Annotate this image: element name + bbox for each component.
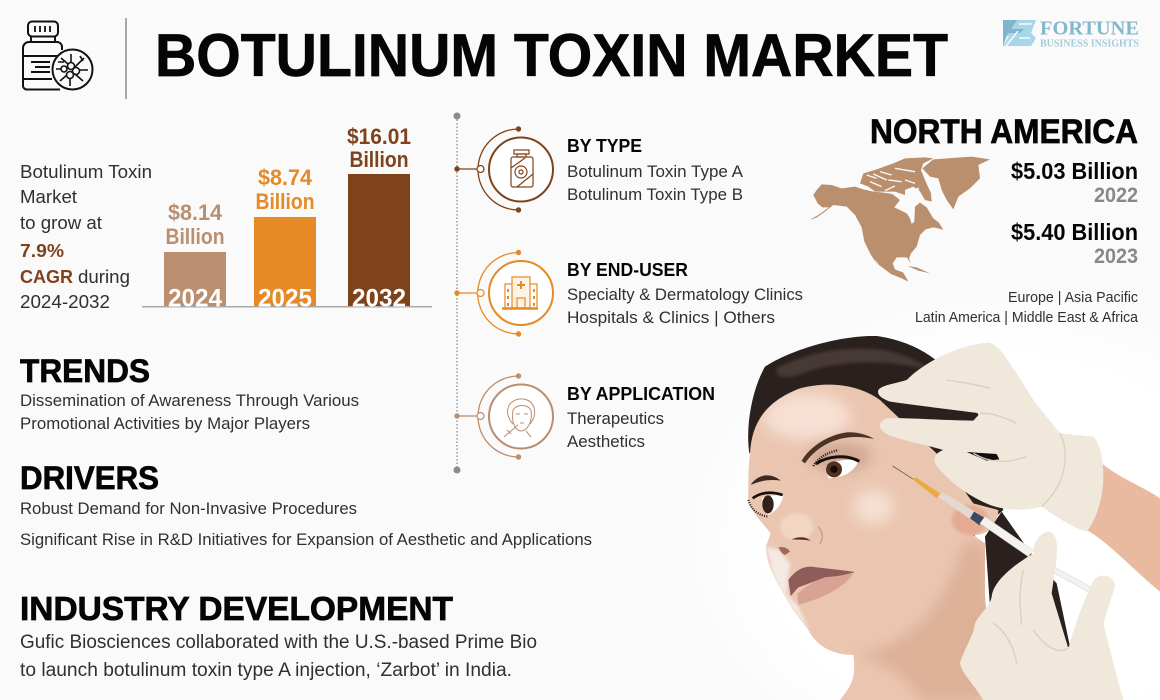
trends section: Promotional Activities by Major Players bbox=[20, 414, 310, 433]
stat: 2023 bbox=[1011, 219, 1138, 268]
text block: CAGR summary: 7.9% bbox=[20, 240, 64, 261]
drivers section: DRIVERS bbox=[20, 460, 159, 496]
segment: by application: Therapeutics bbox=[567, 409, 664, 428]
drivers section: Robust Demand for Non-Invasive Procedures bbox=[20, 499, 357, 518]
icon: medicine bottle with virus bbox=[23, 22, 92, 90]
bar 2025: 2025 bbox=[258, 284, 312, 312]
face shading bbox=[763, 393, 997, 700]
industry development section: Gufic Biosciences collaborated with the U.S.-based Prime Bio bbox=[20, 632, 537, 653]
other regions: Europe | Asia Pacific bbox=[1008, 290, 1138, 306]
lips bbox=[788, 567, 855, 605]
upper gloved hand bbox=[878, 343, 1103, 532]
hair bbox=[748, 336, 1003, 537]
icon: vial bbox=[511, 150, 533, 187]
text block: CAGR summary: to grow at bbox=[20, 212, 102, 233]
stat: 2022: $5.03 Billion bbox=[1011, 158, 1138, 184]
trends section: Dissemination of Awareness Through Various bbox=[20, 391, 359, 410]
lower gloved hand bbox=[960, 532, 1123, 700]
stat: 2022: 2022 bbox=[1094, 184, 1138, 207]
trends section: TRENDS bbox=[20, 353, 150, 389]
bar 2032: $16.01 bbox=[347, 124, 411, 149]
segment timeline bbox=[454, 112, 460, 474]
nose bbox=[778, 527, 822, 555]
segment: by end-user: Specialty & Dermatology Clinics bbox=[567, 285, 803, 304]
bar 2024: $8.14 bbox=[168, 200, 223, 225]
header divider bbox=[125, 18, 127, 99]
segment: by application bbox=[454, 373, 715, 460]
drivers section bbox=[20, 460, 592, 549]
stat: 2022 bbox=[1011, 158, 1138, 207]
regional panel: North America bbox=[809, 113, 1139, 326]
bar 2024 bbox=[164, 200, 226, 312]
segment: by end-user: BY END-USER bbox=[567, 259, 688, 280]
syringe bbox=[893, 466, 1093, 593]
stat: 2023: 2023 bbox=[1094, 245, 1138, 268]
segment: by end-user: Hospitals & Clinics | Others bbox=[567, 308, 775, 327]
text block: CAGR summary: Botulinum Toxin bbox=[20, 161, 152, 182]
photo: woman receiving injection bbox=[748, 336, 1160, 700]
industry development section: INDUSTRY DEVELOPMENT bbox=[20, 590, 453, 627]
industry development section: to launch botulinum toxin type A injection, ‘Zarbot’ in India. bbox=[20, 660, 512, 681]
hair lock behind neck bbox=[985, 512, 1070, 650]
bar 2024: Billion bbox=[166, 224, 224, 249]
segment: by type bbox=[454, 126, 744, 213]
logo: Fortune Business Insights bbox=[1003, 18, 1139, 50]
segment: by type: BY TYPE bbox=[567, 135, 642, 156]
logo: Fortune Business Insights: BUSINESS INSIGHTS bbox=[1040, 38, 1139, 50]
text block: CAGR summary: Market bbox=[20, 186, 77, 207]
bar 2025: Billion bbox=[256, 189, 314, 214]
segment: by type: Botulinum Toxin Type B bbox=[567, 185, 743, 204]
logo: Fortune Business Insights: FORTUNE bbox=[1040, 18, 1139, 40]
stat: 2023: $5.40 Billion bbox=[1011, 219, 1138, 245]
bar chart: market size bbox=[142, 124, 432, 312]
drivers section: Significant Rise in R&D Initiatives for Expansion of Aesthetic and Applications bbox=[20, 530, 592, 549]
regional panel: North America: NORTH AMERICA bbox=[870, 113, 1138, 151]
industry development section bbox=[20, 590, 537, 681]
text block: CAGR summary: CAGR bbox=[20, 266, 73, 287]
icon: hospital bbox=[502, 277, 538, 308]
other regions: Latin America | Middle East & Africa bbox=[915, 310, 1139, 326]
face and neck bbox=[748, 385, 998, 700]
title: BOTULINUM TOXIN MARKET bbox=[155, 22, 948, 89]
bar 2025: $8.74 bbox=[258, 165, 313, 190]
text block: CAGR summary: 2024-2032 bbox=[20, 291, 110, 312]
bar 2032: Billion bbox=[350, 147, 408, 172]
text block: CAGR summary bbox=[20, 161, 152, 312]
segment: by end-user bbox=[454, 250, 803, 337]
segment: by type: Botulinum Toxin Type A bbox=[567, 162, 744, 181]
bar 2032: 2032 bbox=[352, 284, 406, 312]
other regions bbox=[915, 290, 1139, 326]
map: North America bbox=[809, 157, 990, 282]
eyes and brows bbox=[748, 432, 874, 517]
arm bbox=[1087, 463, 1160, 592]
segment: by application: BY APPLICATION bbox=[567, 383, 715, 404]
segment: by application: Aesthetics bbox=[567, 432, 645, 451]
text block: CAGR summary: during bbox=[78, 266, 130, 287]
bar 2025 bbox=[254, 165, 316, 312]
trends section bbox=[20, 353, 359, 433]
icon: face with syringe bbox=[504, 399, 535, 437]
bar 2024: 2024 bbox=[168, 284, 222, 312]
bar 2032 bbox=[347, 124, 411, 312]
